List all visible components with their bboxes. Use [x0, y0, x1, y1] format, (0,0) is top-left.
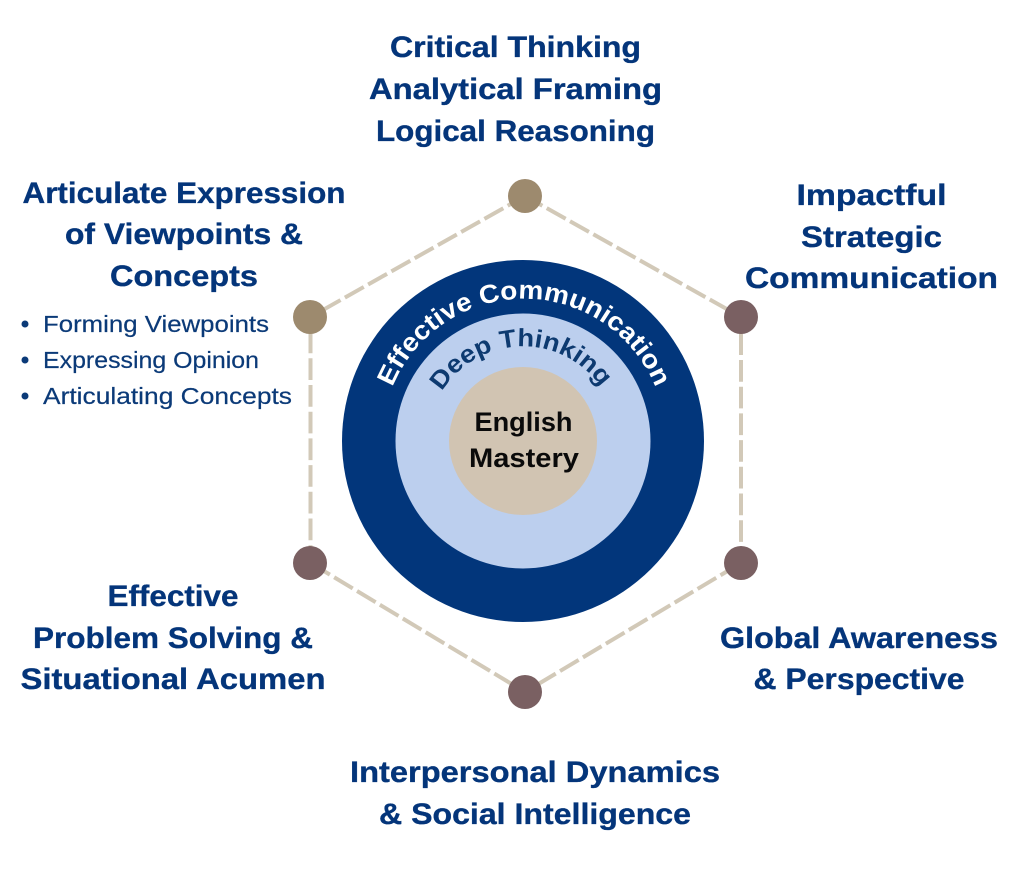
heading: Interpersonal Dynamics and Social Intelligence: & Social Intelligence — [379, 798, 691, 831]
heading: Global Awareness and Perspective — [720, 622, 998, 696]
heading: Interpersonal Dynamics and Social Intelligence: Interpersonal Dynamics — [350, 756, 720, 789]
node: upper left — [293, 300, 327, 334]
bullet list — [22, 311, 292, 409]
curved label: Effective Communication: Effective Communication — [376, 284, 666, 386]
curved label: Deep Thinking: Deep Thinking — [429, 328, 610, 390]
center label: English Mastery — [469, 407, 579, 473]
heading: Impactful Strategic Communication: Communication — [745, 262, 998, 295]
heading: Articulate Expression of Viewpoints and Concepts: Concepts — [110, 260, 258, 293]
bullet list: Expressing Opinion — [43, 347, 259, 373]
heading: Critical Thinking group: Analytical Framing — [369, 73, 662, 106]
hexagon dashed connector — [310, 196, 741, 692]
center label: English Mastery: English — [474, 407, 572, 437]
node: upper right — [724, 300, 758, 334]
heading: Effective Problem Solving and Situational Acumen: Effective — [108, 580, 238, 613]
node: bottom — [508, 675, 542, 709]
node: lower right — [724, 546, 758, 580]
heading: Effective Problem Solving and Situational Acumen: Problem Solving & — [33, 622, 313, 655]
heading: Global Awareness and Perspective: & Perspective — [754, 663, 964, 696]
heading: Impactful Strategic Communication — [745, 179, 998, 295]
center label: English Mastery: Mastery — [469, 443, 579, 473]
heading: Articulate Expression of Viewpoints and Concepts: of Viewpoints & — [65, 218, 303, 251]
heading: Impactful Strategic Communication: Impactful — [796, 179, 946, 212]
heading: Critical Thinking group: Critical Thinking — [390, 31, 641, 64]
heading: Critical Thinking group: Logical Reasoning — [376, 115, 655, 148]
middle circle: Deep Thinking — [396, 314, 650, 568]
heading: Articulate Expression of Viewpoints and Concepts — [22, 177, 346, 293]
outer circle: Effective Communication — [342, 260, 704, 622]
inner circle: English Mastery — [449, 367, 597, 515]
heading: Effective Problem Solving and Situational Acumen — [20, 580, 326, 696]
node: lower left — [293, 546, 327, 580]
heading: Impactful Strategic Communication: Strategic — [801, 221, 942, 254]
bullet list: Forming Viewpoints — [43, 311, 269, 337]
heading: Interpersonal Dynamics and Social Intelligence — [350, 756, 720, 831]
heading: Effective Problem Solving and Situational Acumen: Situational Acumen — [20, 663, 326, 696]
heading: Global Awareness and Perspective: Global Awareness — [720, 622, 998, 655]
node: top — [508, 179, 542, 213]
heading: Critical Thinking group — [369, 31, 662, 148]
heading: Articulate Expression of Viewpoints and Concepts: Articulate Expression — [22, 177, 346, 210]
bullet list: Articulating Concepts — [43, 383, 292, 409]
